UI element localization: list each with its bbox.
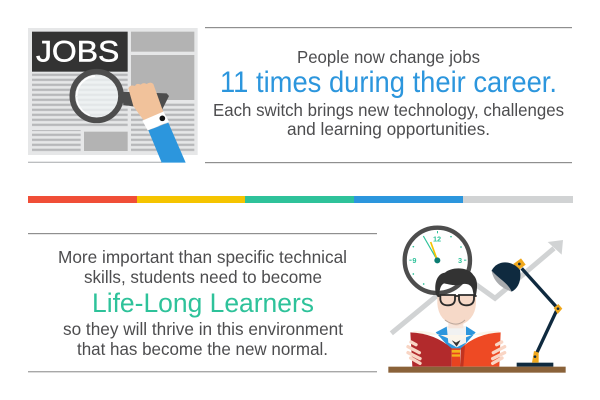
illustration: student reading at desk — [388, 228, 566, 373]
JOBS headline box: JOBS — [36, 35, 119, 68]
open red book with hands — [408, 331, 505, 367]
desk lamp — [492, 258, 562, 367]
text block: life-long learners: so they will thrive in this environment — [63, 319, 343, 339]
student — [435, 268, 477, 350]
top rule of lower section — [28, 233, 377, 234]
magnifying glass — [72, 72, 169, 120]
bottom rule of top section — [205, 162, 572, 163]
wall clock: 3 — [458, 256, 462, 265]
growth arrow — [391, 240, 563, 333]
text block: career changes: People now change jobs — [297, 47, 480, 67]
text block: life-long learners: More important than specific technical — [58, 247, 347, 267]
text block: life-long learners: skills, students need to become — [84, 267, 322, 287]
text block: career changes — [213, 47, 564, 139]
illustration: newspaper with magnifying glass — [28, 28, 198, 163]
JOBS headline box — [32, 32, 128, 72]
wall clock: 9 — [412, 256, 416, 265]
text block: career changes: and learning opportunities. — [287, 119, 490, 139]
text block: life-long learners: that has become the new normal. — [77, 339, 328, 359]
text block: life-long learners — [58, 247, 347, 359]
wall clock: 12 — [433, 234, 441, 243]
shirt cuff with button — [142, 112, 169, 130]
blue sleeve — [148, 123, 186, 163]
wall clock — [405, 228, 470, 293]
highlight: 11 times during their career: 11 times during their career. — [220, 66, 557, 99]
text block: career changes: Each switch brings new technology, challenges — [213, 100, 564, 120]
wooden desk — [388, 367, 566, 373]
bottom rule of lower section — [28, 371, 377, 372]
top rule — [205, 27, 572, 28]
highlight: Life-Long Learners: Life-Long Learners — [92, 288, 314, 318]
hand holding magnifier — [128, 83, 163, 121]
colour divider bar — [28, 196, 573, 203]
